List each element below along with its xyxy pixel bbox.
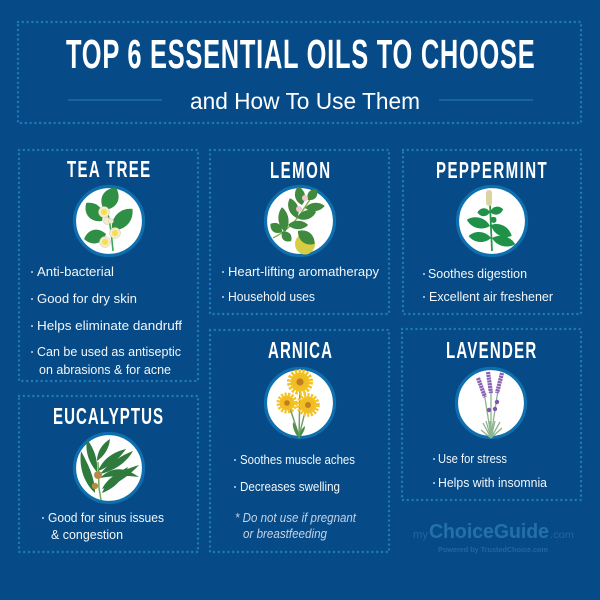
panel: lemon (210, 150, 389, 314)
benefits: arnica: Soothes muscle aches (240, 452, 355, 467)
icon: lavender sprigs (456, 368, 526, 438)
benefits: eucalyptus: & congestion (51, 527, 123, 542)
icon: lemon branch (266, 185, 334, 256)
benefits: peppermint (423, 266, 554, 304)
benefits: lavender: Helps with insomnia (438, 475, 548, 490)
benefits: tea tree: Anti-bacterial (37, 264, 114, 279)
subtitle: and How To Use Them (190, 88, 420, 114)
benefits: tea tree (31, 264, 182, 377)
logo: myChoiceGuide: .com (550, 529, 574, 541)
note: arnica warning: or breastfeeding (243, 526, 328, 541)
heading: arnica: ARNICA (268, 338, 332, 364)
benefits: lemon (222, 264, 379, 304)
benefits: lemon: Heart-lifting aromatherapy (228, 264, 379, 279)
note: arnica warning: * Do not use if pregnant (235, 510, 357, 525)
panel: header (18, 22, 581, 123)
benefits: tea tree: Helps eliminate dandruff (37, 318, 182, 333)
panel: eucalyptus (19, 396, 198, 552)
logo: myChoiceGuide: Powered by TrustedChoice.com (438, 545, 548, 554)
heading: tea tree: TEA TREE (67, 157, 150, 183)
heading: lavender: LAVENDER (446, 338, 536, 364)
panel: lavender (402, 329, 581, 500)
icon: peppermint plant (458, 186, 526, 256)
logo: myChoiceGuide: ChoiceGuide (429, 521, 549, 543)
logo: myChoiceGuide (413, 521, 574, 554)
note: arnica warning (235, 510, 357, 541)
heading: eucalyptus: EUCALYPTUS (53, 404, 163, 430)
icon: tea tree sprig (74, 184, 144, 256)
benefits: eucalyptus: Good for sinus issues (48, 510, 164, 525)
benefits: tea tree: Can be used as antiseptic (37, 344, 181, 359)
icon: eucalyptus branch (74, 434, 144, 502)
panel: arnica (210, 330, 389, 552)
heading: peppermint: PEPPERMINT (436, 158, 547, 184)
icon: arnica flowers (266, 368, 334, 439)
benefits: arnica (234, 452, 355, 494)
panel: tea tree (19, 150, 198, 381)
benefits: peppermint: Excellent air freshener (429, 289, 554, 304)
heading: lemon: LEMON (270, 158, 330, 184)
benefits: lavender: Use for stress (438, 451, 507, 466)
benefits: tea tree: on abrasions & for acne (39, 362, 171, 377)
benefits: arnica: Decreases swelling (240, 479, 340, 494)
benefits: lavender (433, 451, 548, 490)
benefits: peppermint: Soothes digestion (428, 266, 527, 281)
benefits: lemon: Household uses (228, 289, 315, 304)
panel: peppermint (403, 150, 581, 314)
title: TOP 6 ESSENTIAL OILS TO CHOOSE (66, 32, 535, 78)
benefits: eucalyptus (42, 510, 164, 542)
benefits: tea tree: Good for dry skin (37, 291, 137, 306)
logo: myChoiceGuide: my (413, 529, 429, 541)
